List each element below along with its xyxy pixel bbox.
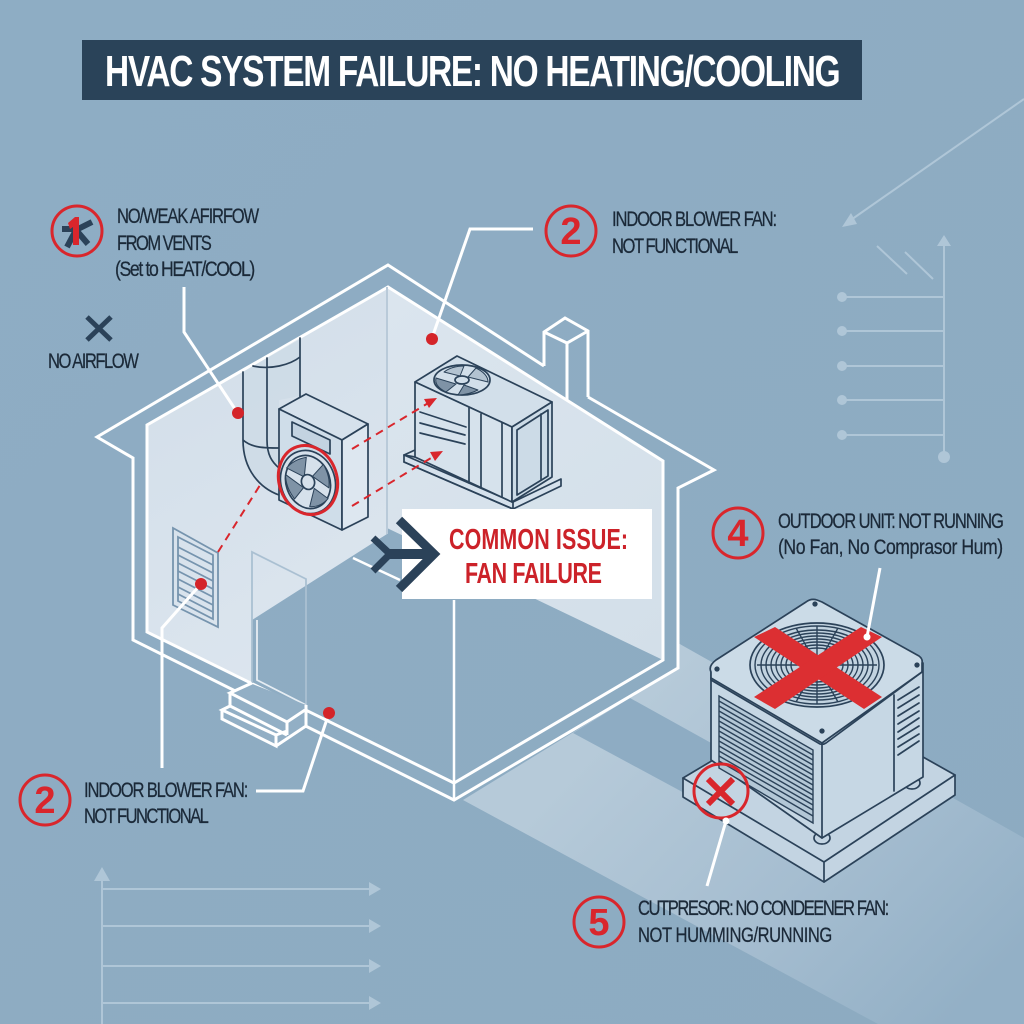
badge 5: 5 [588, 902, 610, 944]
leader lines and red dots [162, 229, 533, 791]
label 4: OUTDOOR UNIT: NOT RUNNING [778, 510, 1004, 534]
label 5: CUTPRESOR: NO CONDEENER FAN: [638, 897, 889, 921]
icon: no airflow X [87, 317, 111, 340]
ground light beam [463, 643, 1024, 1024]
label 1 [115, 205, 259, 281]
blower fan [272, 443, 344, 521]
label 2 top: NOT FUNCTIONAL [612, 235, 738, 259]
callout arrow icon [373, 520, 434, 589]
badge 1 with fan icon [52, 206, 102, 256]
side slits [898, 687, 919, 755]
badge 2 top [546, 206, 596, 256]
label 2 bottom: INDOOR BLOWER FAN: [84, 779, 248, 803]
badge 4: 4 [727, 513, 749, 555]
label 2 top [612, 208, 777, 259]
house cutaway [97, 265, 714, 800]
indoor blower unit [272, 394, 368, 530]
callout: common issue [402, 509, 652, 599]
door [252, 552, 306, 705]
title banner: HVAC SYSTEM FAILURE: NO HEATING/COOLING [105, 48, 841, 96]
label 2 top: INDOOR BLOWER FAN: [612, 208, 777, 232]
red fan highlight ring [270, 438, 346, 522]
chimney [544, 318, 588, 400]
no airflow label: NO AIRFLOW [48, 350, 139, 374]
red airflow dashed arrows [218, 398, 443, 552]
entry steps [222, 683, 306, 746]
badge 5 [574, 897, 624, 947]
compressor fault marker [694, 764, 748, 818]
callout: common issue: FAN FAILURE [465, 558, 602, 590]
duct [243, 338, 300, 495]
upper condenser unit [404, 356, 561, 509]
right wall panel [387, 287, 663, 660]
label 1: FROM VENTS [117, 232, 212, 256]
condenser fan [434, 365, 490, 395]
badge 2 bottom [20, 775, 70, 825]
badge 4 [713, 508, 763, 558]
label 1: (Set to HEAT/COOL) [115, 258, 255, 281]
label 4 [778, 510, 1004, 559]
left wall panel [147, 287, 387, 683]
louver grille [719, 696, 813, 823]
label 4: (No Fan, No Comprasor Hum) [778, 536, 1003, 559]
red X over fan [754, 627, 882, 709]
label 5: NOT HUMMING/RUNNING [638, 924, 832, 948]
callout: common issue: COMMON ISSUE: [449, 524, 628, 556]
badge 2 top: 2 [560, 211, 582, 253]
house outline [97, 265, 714, 800]
label 2 bottom: NOT FUNCTIONAL [84, 805, 209, 829]
corner edge [386, 287, 388, 534]
label 1: NO/WEAK AFIRFOW [117, 205, 259, 229]
label 2 bottom [84, 779, 248, 829]
outdoor leader lines [707, 568, 880, 886]
outdoor condenser unit [683, 599, 955, 882]
fan grille [750, 623, 884, 707]
label 5 [638, 897, 889, 948]
badge 2 bottom: 2 [34, 780, 56, 822]
wall vent [173, 528, 218, 627]
cabinet [710, 599, 923, 844]
decorative airflow diagram: top right [837, 99, 1024, 463]
concrete pad [683, 750, 955, 882]
decorative airflow diagram: bottom left [94, 867, 381, 1024]
